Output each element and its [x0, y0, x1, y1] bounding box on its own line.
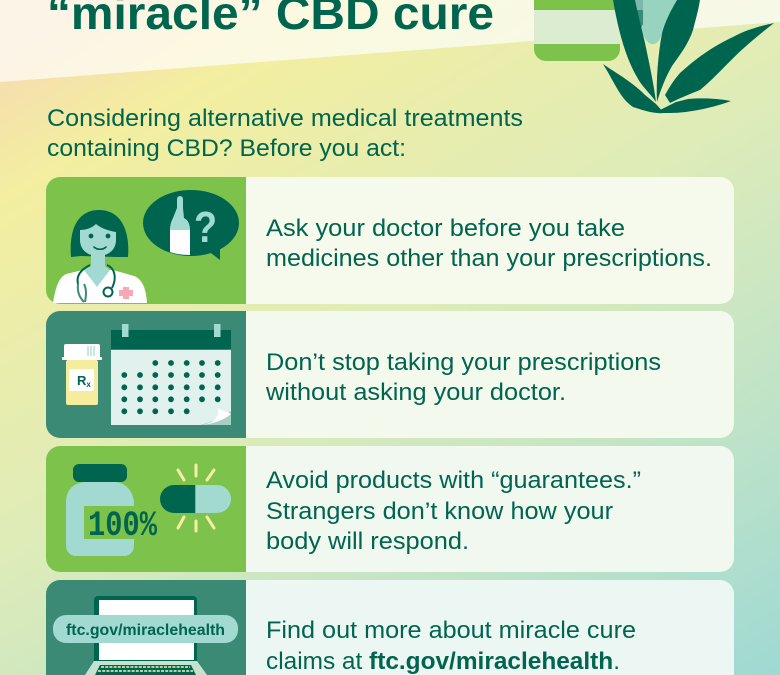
text: without asking your doctor. — [265, 379, 566, 406]
text: claims at ftc.gov/miraclehealth. — [266, 648, 620, 675]
text: Avoid products with “guarantees.” — [266, 467, 641, 494]
panel: keep prescriptions — [46, 311, 734, 438]
icon panel — [46, 446, 246, 572]
text — [266, 617, 636, 675]
dropper — [634, 0, 677, 44]
text — [265, 349, 661, 406]
icon panel — [46, 177, 246, 304]
text: body will respond. — [266, 528, 469, 555]
icon: pill bottle: x — [86, 380, 91, 389]
icon: speech bubble with dropper — [143, 190, 239, 260]
top light band — [0, 0, 780, 82]
card background — [46, 580, 734, 675]
card background — [46, 311, 734, 438]
icon: laptop — [85, 596, 207, 675]
bottle — [534, 0, 620, 61]
icon: pill bottle: R — [77, 373, 86, 388]
icon: doctor — [53, 210, 147, 303]
panel: ask your doctor — [46, 177, 734, 304]
text: Ask your doctor before you take — [266, 215, 625, 242]
text: Strangers don’t know how your — [266, 498, 613, 525]
icon: CBD bottle and leaves — [534, 0, 774, 113]
icon: 100% jar — [66, 464, 158, 556]
icon: calendar — [111, 324, 231, 425]
panel: avoid guarantees — [46, 446, 734, 572]
sparkle rays — [178, 465, 214, 531]
text: Find out more about miracle cure — [266, 617, 636, 644]
icon: 100% jar: 100% — [88, 506, 158, 546]
intro text — [47, 105, 523, 162]
icon: pill bottle — [62, 344, 102, 405]
cannabis leaves — [603, 0, 774, 113]
card background — [46, 177, 734, 304]
icon: capsule — [160, 465, 231, 531]
text — [266, 467, 641, 555]
calendar dots — [121, 360, 221, 414]
text: medicines other than your prescriptions. — [266, 245, 712, 272]
panel: find out more — [46, 580, 734, 675]
icon panel — [46, 311, 246, 438]
card background — [46, 446, 734, 572]
text: Don’t stop taking your prescriptions — [266, 349, 661, 376]
text — [266, 215, 712, 272]
intro text: containing CBD? Before you act: — [47, 135, 406, 162]
url pill — [53, 615, 238, 643]
icon panel — [46, 580, 246, 675]
intro text: Considering alternative medical treatments — [47, 105, 523, 132]
icon: speech bubble with dropper: ? — [194, 203, 217, 252]
url pill: ftc.gov/miraclehealth — [66, 622, 225, 639]
